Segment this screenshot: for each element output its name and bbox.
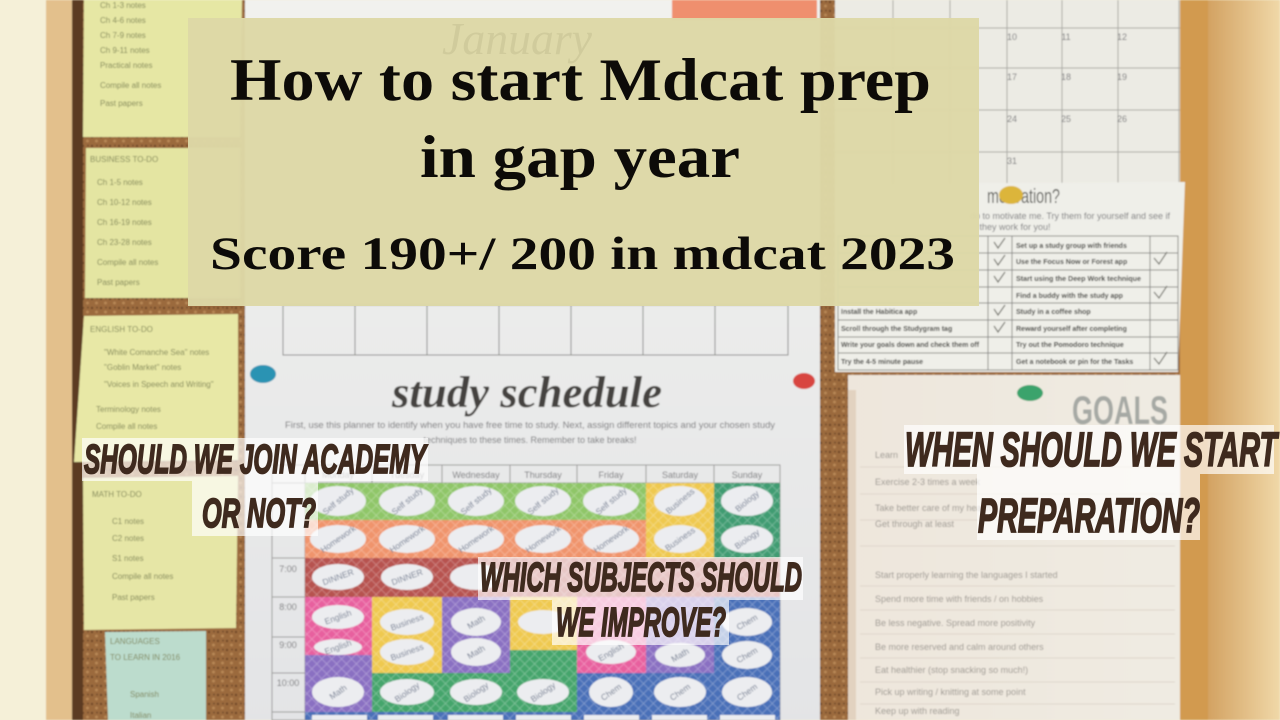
day headers: Saturday: [662, 470, 699, 480]
activity tag text: Math: [465, 643, 487, 661]
sticky note: top: Ch 9-11 notes: [100, 46, 150, 55]
sticky note: top: Practical notes: [100, 61, 152, 70]
goals sheet: Learn: [875, 450, 898, 460]
main title: [230, 47, 931, 190]
goals sheet: Exercise 2-3 times a week: [875, 477, 981, 487]
pin: green: [1017, 385, 1043, 401]
activity tag text: Business: [663, 525, 697, 553]
sticky note: top: Compile all notes: [100, 81, 161, 90]
sticky note: business to-do: BUSINESS TO-DO: [90, 155, 158, 164]
sticky note: math to-do: MATH TO-DO: [92, 490, 142, 499]
calendar sheet: 24: [1007, 114, 1017, 124]
activity tag text: Chem: [599, 681, 623, 703]
motivation sheet: Find a buddy with the study app: [1016, 293, 1123, 300]
calendar sheet: 25: [1061, 114, 1071, 124]
sticky note: math to-do: S1 notes: [112, 554, 144, 563]
time labels: 9:00: [279, 640, 297, 650]
goals sheet: Take better care of my health: [875, 503, 991, 513]
sticky note: english to-do: [74, 314, 238, 462]
activity tag text: [318, 485, 762, 704]
day headers: Sunday: [732, 470, 763, 480]
subtitle: Score 190+/ 200 in mdcat 2023: [210, 228, 955, 280]
sticky note: top: [83, 0, 242, 137]
motivation sheet: Try out the Pomodoro technique: [1016, 342, 1124, 349]
activity tag text: DINNER: [321, 567, 355, 587]
callout: should we join academy: OR NOT?: [202, 490, 316, 536]
schedule grid: [272, 465, 780, 720]
calendar star row: [283, 305, 788, 355]
activity tag text: Math: [327, 682, 349, 702]
day headers: Tuesday: [390, 470, 425, 480]
goals sheet: Pick up writing / knitting at some point: [875, 687, 1026, 697]
pin: yellow flower: [999, 186, 1023, 204]
motivation sheet: they work for you!: [979, 222, 1051, 232]
activity tag text: Homework: [318, 523, 358, 555]
sticky note: math to-do: Compile all notes: [112, 572, 173, 581]
activity tag text: Math: [669, 646, 691, 664]
activity tag text: English: [323, 607, 353, 626]
motivation sheet: Install the Habitica app: [841, 309, 917, 316]
day headers: Thursday: [524, 470, 562, 480]
goals sheet: Get through at least: [875, 519, 955, 529]
sticky note: business to-do: Compile all notes: [97, 258, 158, 267]
sticky note: business to-do: Ch 1-5 notes: [97, 178, 143, 187]
motivation sheet: Use the Focus Now or Forest app: [1016, 259, 1127, 266]
activity tag text: Self study: [320, 485, 356, 517]
title panel: [188, 13, 979, 306]
day headers: Monday: [322, 470, 355, 480]
activity tag text: Chem: [735, 681, 759, 703]
sticky note: business to-do: Past papers: [97, 278, 140, 287]
white activity tags: [310, 486, 775, 720]
activity tag text: Biology: [529, 679, 558, 704]
time labels: 7:00: [279, 564, 297, 574]
callout: should we join academy: [82, 436, 428, 536]
motivation sheet: do to motivate me. Try them for yourself and see if: [970, 211, 1171, 221]
sticky note: english to-do: ENGLISH TO-DO: [90, 325, 153, 334]
sticky note: math to-do: [83, 476, 238, 630]
time labels: 8:00: [279, 602, 297, 612]
motivation sheet: Get a notebook or pin for the Tasks: [1016, 359, 1133, 366]
goals sheet: [848, 375, 1180, 720]
sticky note: math to-do: C1 notes: [112, 517, 144, 526]
day headers: Friday: [598, 470, 624, 480]
paper: planner sheet: [245, 0, 820, 720]
calendar sheet: 26: [1117, 114, 1127, 124]
calendar sheet: 17: [1007, 72, 1017, 82]
sticky note: languages: Italian: [130, 711, 151, 720]
main title: in gap year: [420, 124, 740, 190]
sticky note: business to-do: Ch 10-12 notes: [97, 198, 152, 207]
sticky note: english to-do: Compile all notes: [96, 422, 157, 431]
goals sheet: Spend more time with friends / on hobbies: [875, 594, 1044, 604]
activity tag text: Chem: [735, 645, 759, 665]
sticky note: business to-do: Ch 23-28 notes: [97, 238, 152, 247]
sticky note: math to-do: Past papers: [112, 593, 155, 602]
activity tag text: Chem: [668, 681, 692, 703]
time labels: [277, 564, 299, 688]
sticky note: top: Ch 1-3 notes: [100, 1, 146, 10]
activity tag text: Self study: [389, 485, 425, 517]
coloured blocks: [305, 483, 780, 720]
callout: which subjects should we improve: [478, 554, 803, 645]
study schedule heading: study schedule: [391, 368, 662, 417]
calendar sheet: 19: [1117, 72, 1127, 82]
goals sheet: Keep up with reading: [875, 706, 960, 716]
callout: which subjects should we improve: WHICH SUBJECTS SHOULD: [480, 554, 802, 600]
callout: which subjects should we improve: WE IMPROVE?: [556, 599, 726, 645]
instructions text: techniques to these times. Remember to take breaks!: [423, 435, 637, 445]
activity tag text: English: [323, 637, 353, 656]
sticky note: languages: LANGUAGES: [110, 637, 160, 646]
paper: note strip at top of planner: [672, 0, 817, 20]
goals sheet: Be less negative. Spread more positivity: [875, 618, 1036, 628]
sticky note: languages: [105, 631, 206, 720]
activity tag text: Homework: [523, 523, 563, 555]
activity tag text: Homework: [591, 523, 631, 555]
activity tag text: Biology: [462, 679, 491, 704]
calendar sheet: 31: [1007, 156, 1017, 166]
sticky note: top: Ch 7-9 notes: [100, 31, 146, 40]
motivation sheet: Set up a study group with friends: [1016, 243, 1127, 250]
activity tag text: Biology: [733, 488, 761, 514]
motivation sheet: motivation?: [987, 186, 1060, 208]
instructions text: First, use this planner to identify when you have free time to study. Next, assign different topics and your chosen study: [285, 420, 776, 430]
day headers: Wednesday: [452, 470, 500, 480]
sticky note: english to-do: "White Comanche Sea" notes: [104, 348, 209, 357]
goals sheet: Start properly learning the languages I started: [875, 570, 1058, 580]
activity tag text: Business: [389, 611, 425, 633]
activity tag text: Self study: [525, 485, 561, 517]
activity tag text: Business: [389, 641, 425, 663]
goals sheet: Eat healthier (stop snacking so much!): [875, 665, 1028, 675]
sticky note: languages: TO LEARN IN 2016: [110, 653, 181, 662]
calendar sheet: 18: [1061, 72, 1071, 82]
goals sheet: Be more reserved and calm around others: [875, 642, 1044, 652]
activity tag text: Homework: [456, 523, 496, 555]
calendar sheet: [835, 0, 1180, 184]
sticky note: business to-do: Ch 16-19 notes: [97, 218, 152, 227]
goals sheet: GOALS: [1072, 389, 1168, 433]
motivation sheet: Scroll through the Studygram tag: [841, 326, 952, 333]
main title: How to start Mdcat prep: [230, 47, 931, 113]
activity tag text: Business: [664, 486, 696, 516]
motivation sheet: Reward yourself after completing: [1016, 326, 1127, 333]
activity tag text: DINNER: [390, 567, 424, 587]
activity tag text: Biology: [393, 679, 422, 704]
activity tag text: Self study: [458, 485, 494, 517]
sticky note: math to-do: C2 notes: [112, 534, 144, 543]
activity tag text: Biology: [733, 526, 762, 551]
calendar sheet: 10: [1007, 32, 1017, 42]
sticky note: english to-do: "Voices in Speech and Writing": [104, 380, 214, 389]
sticky note: top: Past papers: [100, 99, 143, 108]
activity tag text: English: [596, 641, 626, 663]
motivation sheet: Study in a coffee shop: [1016, 309, 1091, 316]
calendar sheet: 12: [1117, 32, 1127, 42]
pin: blue: [250, 365, 276, 383]
callout: should we join academy: SHOULD WE JOIN ACADEMY: [84, 436, 428, 482]
faint January heading behind panel: January: [442, 13, 593, 64]
activity tag text: Homework: [387, 523, 427, 555]
motivation sheet: Try the 4-5 minute pause: [841, 359, 923, 366]
sticky note: languages: Spanish: [130, 690, 159, 699]
sticky note: english to-do: "Goblin Market" notes: [104, 363, 181, 372]
activity tag text: Self study: [593, 485, 629, 517]
activity tag text: Chem: [735, 612, 759, 632]
activity tag text: Math: [465, 613, 487, 631]
sticky note: english to-do: Terminology notes: [96, 405, 161, 414]
motivation sheet: [835, 182, 1185, 372]
motivation sheet: Write your goals down and check them off: [841, 342, 980, 349]
sticky note: business to-do: [85, 148, 240, 298]
time labels: 10:00: [277, 678, 299, 688]
pin: red: [793, 373, 815, 389]
calendar sheet: 11: [1061, 32, 1071, 42]
callout: when should we start preparation: [904, 424, 1279, 543]
sticky note: top: Ch 4-6 notes: [100, 16, 146, 25]
motivation sheet: Start using the Deep Work technique: [1016, 276, 1141, 283]
instructions text: [285, 420, 776, 445]
day headers: [322, 470, 763, 480]
